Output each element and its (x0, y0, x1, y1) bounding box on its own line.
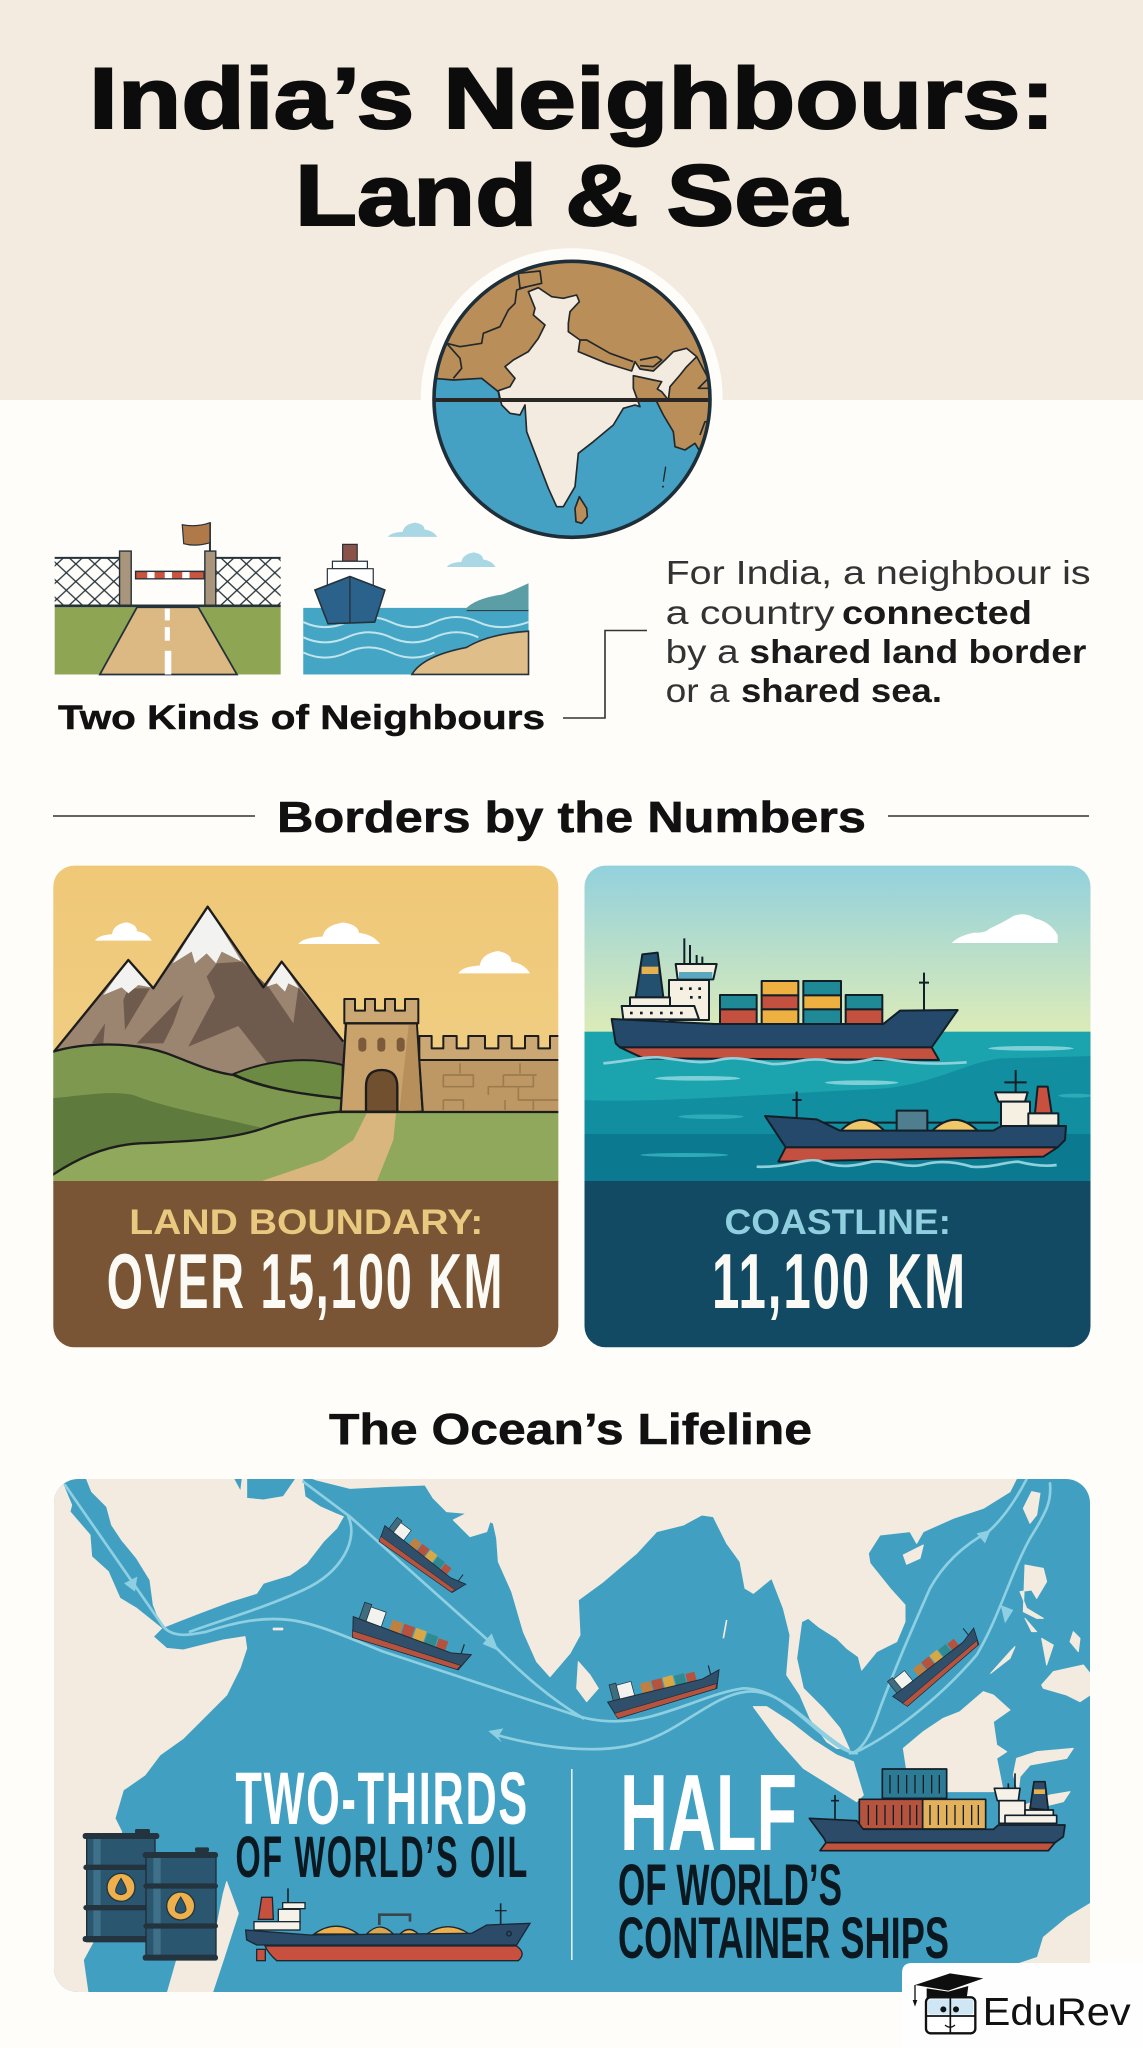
fort wall (420, 1060, 563, 1112)
land masses (50, 1475, 1097, 1995)
stat: half of world's container ships: OF WORLD’S (618, 1853, 842, 1918)
stat: two-thirds of world's oil (236, 1757, 529, 1890)
Sri Lanka (575, 497, 587, 523)
text block: definition: shared sea. (741, 673, 942, 710)
heading: the ocean's lifeline: The Ocean’s Lifeline (329, 1405, 812, 1454)
ship: gas tanker (765, 1070, 1066, 1162)
Borneo (903, 1692, 1010, 1792)
title: Land & Sea (295, 148, 848, 244)
stat: two-thirds of world's oil: OF WORLD’S OIL (236, 1825, 529, 1890)
borders (433, 265, 710, 452)
stat: half of world's container ships: HALF (620, 1752, 797, 1874)
icon: oil tanker (246, 1888, 530, 1961)
text block: definition: connected (842, 595, 1032, 632)
stat: half of world's container ships: CONTAINER SHIPS (618, 1906, 949, 1971)
land (438, 263, 708, 449)
Mindanao (1042, 1665, 1097, 1702)
coastline value: 11,100 KM (712, 1239, 967, 1325)
panel: coastline (580, 860, 1095, 1348)
Palawan (991, 1647, 1015, 1673)
logo: EduRev (902, 1963, 1143, 2048)
land boundary value: OVER 15,100 KM (107, 1239, 504, 1325)
Celebes (1013, 1748, 1073, 1792)
title: India’s Neighbours: (89, 51, 1055, 147)
panel: land boundary (50, 860, 565, 1351)
text block: definition: a country (666, 595, 835, 632)
Sri Lanka (577, 1662, 598, 1702)
stat: half of world's container ships (618, 1752, 949, 1971)
India (498, 288, 697, 507)
shipping routes (65, 1479, 1050, 1753)
icon: oil barrels (83, 1829, 218, 1961)
Visayas (1025, 1618, 1037, 1632)
Hainan (903, 1545, 923, 1564)
ships on routes (347, 1514, 986, 1720)
header band (0, 0, 1143, 400)
heading: borders by the numbers: Borders by the Numbers (277, 793, 866, 842)
hills (233, 1060, 343, 1098)
icon: land border gate (55, 522, 281, 674)
label band (582, 1181, 1095, 1348)
panel: ocean map (50, 1475, 1097, 1995)
land boundary label: LAND BOUNDARY: (129, 1203, 483, 1242)
mountains (57, 926, 344, 1102)
icon: container ship (809, 1769, 1065, 1851)
bottom-right land (1019, 1903, 1090, 1963)
title (89, 51, 1055, 244)
clouds (95, 922, 530, 973)
Luzon (1020, 1565, 1047, 1618)
heading: two kinds of neighbours: Two Kinds of Neighbours (58, 699, 545, 737)
globe: India map (421, 248, 723, 550)
Taiwan (1023, 1492, 1040, 1523)
coastline label: COASTLINE: (724, 1203, 951, 1242)
Sunda (1026, 1791, 1070, 1810)
label band (50, 1181, 565, 1351)
Sumatra (753, 1707, 863, 1802)
ship: container (612, 938, 958, 1060)
fort tower (344, 999, 418, 1023)
text block: definition: shared land border (749, 634, 1086, 671)
cloud (952, 914, 1058, 943)
route arrowheads (124, 1530, 1013, 1742)
connector line (563, 630, 647, 718)
text block: definition (666, 555, 1091, 710)
sea bands (584, 1032, 1090, 1101)
icon: sea with ship (303, 523, 529, 674)
divider (571, 1769, 573, 1960)
water highlights (655, 1046, 1074, 1085)
text block: definition: For India, a neighbour is (666, 555, 1091, 592)
stat: two-thirds of world's oil: TWO-THIRDS (236, 1757, 529, 1840)
text block: definition: by a (666, 634, 739, 671)
text block: definition: or a (666, 673, 730, 710)
logo: EduRev: EduRev (983, 1991, 1131, 2034)
